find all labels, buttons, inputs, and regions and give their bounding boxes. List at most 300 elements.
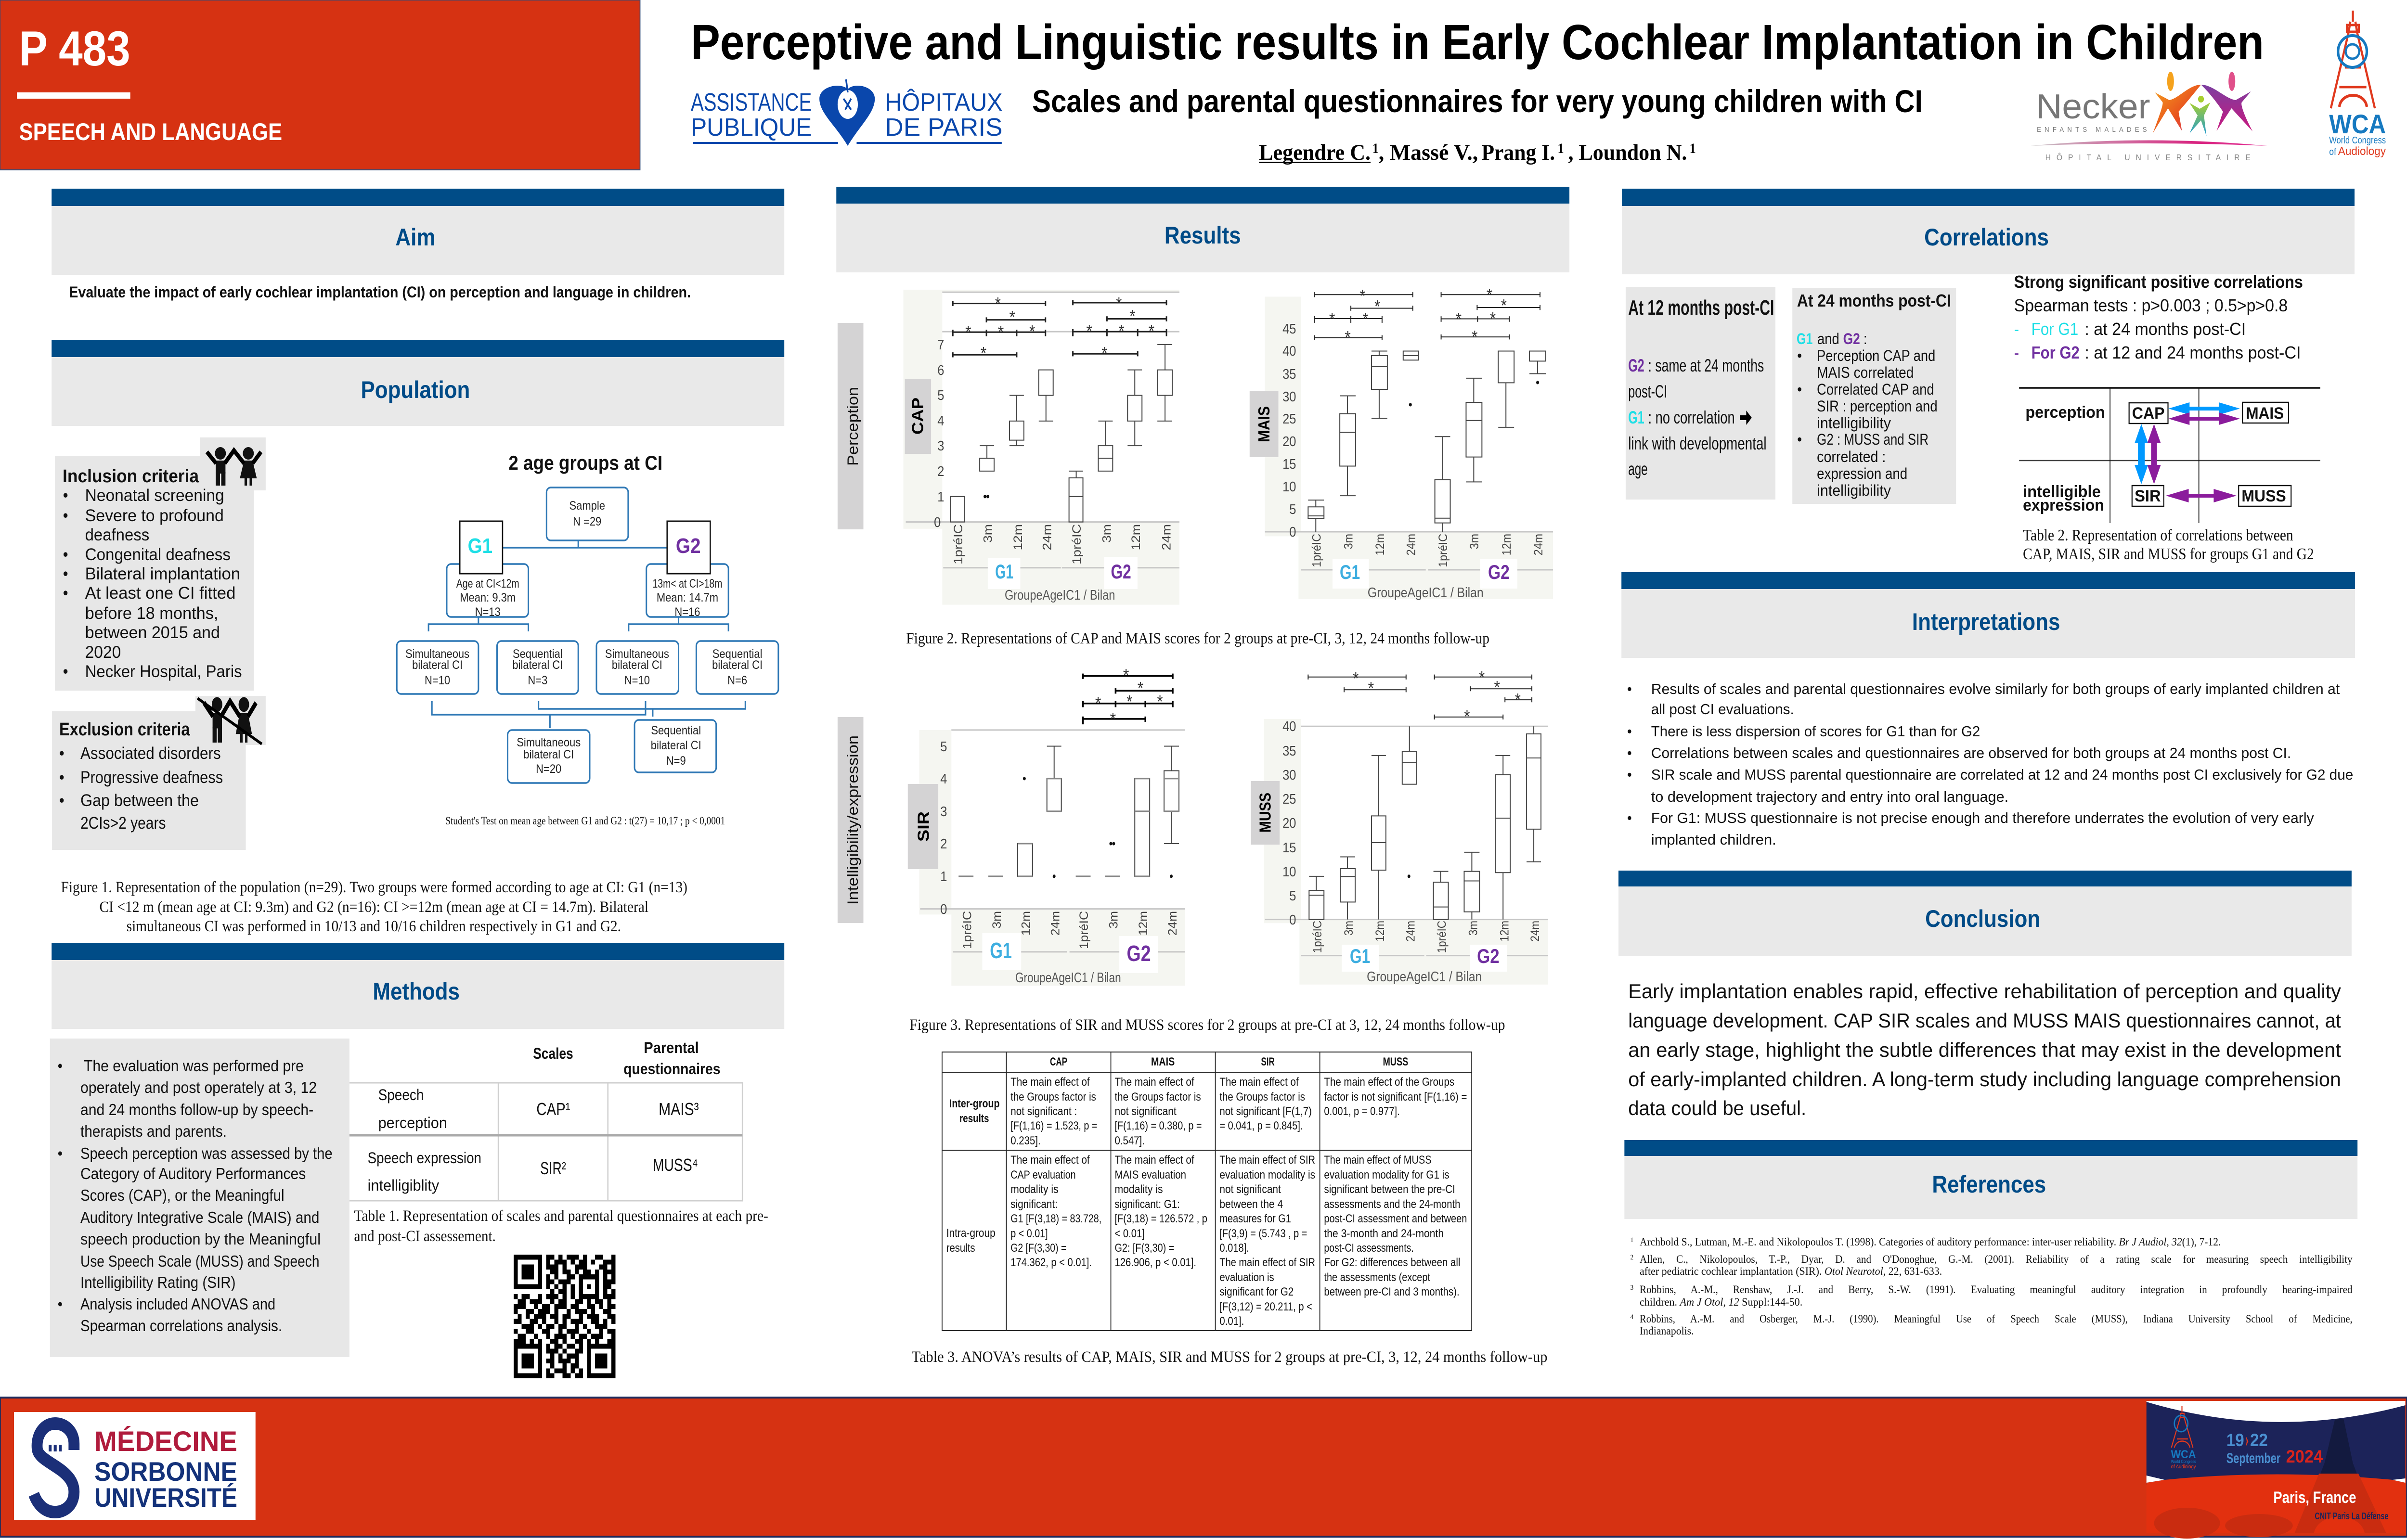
heading: correlations: Correlations (1924, 223, 2049, 251)
chart: MUSS boxplots: G2 (1477, 945, 1500, 968)
table 2: correlation diagram: intelligible (2023, 482, 2101, 500)
logo: Assistance Publique Hopitaux de Paris (691, 79, 1003, 146)
figure 1 caption (61, 878, 687, 935)
authors: 1 (1372, 141, 1379, 156)
table 3: ANOVA results: The main effect of (1010, 1076, 1090, 1088)
table 2 caption: Table 2. Representation of correlations between (2023, 526, 2293, 544)
icon: children crossed out (197, 697, 262, 744)
footer band (0, 1398, 2407, 1539)
total sequential box: Sequential (651, 724, 701, 737)
chart: MUSS boxplots: 12m (1373, 921, 1386, 942)
sample box (546, 488, 628, 540)
chart: MAIS boxplots: 3m (1468, 534, 1481, 549)
box: at 24 months: At 24 months post-CI (1797, 291, 1951, 310)
chart: MUSS boxplots: 30 (1282, 767, 1296, 783)
strong correlations text: - (2014, 320, 2019, 339)
chart: MUSS boxplots: GroupeAgeIC1 / Bilan (1367, 968, 1482, 984)
total sequential box: bilateral CI (651, 739, 701, 752)
chart: MAIS boxplots: 10 (1282, 478, 1296, 494)
G2 age box: Mean: 14.7m (657, 591, 718, 604)
chart: SIR boxplots: 3m (1107, 911, 1120, 929)
table 3: ANOVA results: The main effect of SIR (1219, 1256, 1315, 1269)
inclusion criteria box: deafness (85, 525, 149, 544)
inclusion criteria box: Inclusion criteria (63, 466, 199, 486)
figure 2 caption: Figure 2. Representations of CAP and MAIS scores for 2 groups at pre-CI, 3, 12, 24 months follow-up (906, 629, 1489, 647)
table 3: ANOVA results: CAP (1050, 1055, 1067, 1068)
box: at 24 months (1792, 288, 1956, 504)
logo: World Congress of Audiology (2329, 11, 2386, 157)
box: at 24 months: MAIS correlated (1817, 364, 1914, 381)
table 3: ANOVA results: evaluation is (1219, 1271, 1274, 1283)
chart: CAP boxplots: 24m (1160, 524, 1173, 550)
reference list: 4 (1631, 1313, 1633, 1321)
mini WCA logo (2171, 1406, 2196, 1470)
chart: MAIS boxplots: ********** (1329, 285, 1507, 347)
G1 sequential box: N=3 (528, 674, 547, 687)
student test note: Student's Test on mean age between G1 and G2 : t(27) = 10,17 ; p < 0,0001 (445, 815, 725, 827)
heading: correlations (1622, 189, 2355, 274)
table 3: ANOVA results: [F(1,16) = 0.380, p = (1114, 1119, 1202, 1132)
box: at 24 months: and (1817, 331, 1839, 347)
exclusion criteria box (52, 696, 266, 850)
table 3: ANOVA results: results (946, 1242, 975, 1254)
panel: results (836, 187, 1569, 1365)
G1 sequential box: Sequential (513, 647, 563, 660)
table 1: scales and questionnaires (349, 1040, 742, 1201)
chart: MAIS boxplots: 45 (1282, 321, 1296, 336)
methods text box: Intelligibility Rating (SIR) (80, 1273, 235, 1291)
sample box: N =29 (573, 515, 601, 528)
chart: SIR boxplots: 1préIC (961, 911, 974, 949)
reference list: Robbins, A.-M. and Osberger, M.-J. (1990). Meaningful Use of Speech Scale (MUSS), Indiana University School of Medicine, (1640, 1313, 2353, 1325)
logo: Necker hospital (2031, 72, 2267, 162)
G2 age box: N=16 (674, 605, 700, 618)
table 3: ANOVA results: post-CI assessment and between (1324, 1212, 1467, 1225)
G2 age box: 13m< at CI>18m (652, 577, 722, 590)
table 1 caption: Table 1. Representation of scales and parental questionnaires at each pre- (354, 1206, 768, 1224)
inclusion criteria box: Necker Hospital, Paris (85, 662, 242, 680)
table 2: correlation diagram: MUSS (2241, 487, 2286, 505)
G1 sequential box: bilateral CI (512, 658, 563, 671)
G1 age box (447, 564, 529, 618)
reference list: 2 (1631, 1253, 1633, 1261)
table 1: scales and questionnaires: Scales (533, 1045, 573, 1062)
chart: MAIS boxplots: 1préIC (1437, 534, 1450, 567)
total sequential box: N=9 (666, 754, 686, 767)
chart: MUSS boxplots: 40 (1282, 718, 1296, 734)
inclusion criteria box: Severe to profound (85, 506, 224, 525)
axis label: MUSS: MUSS (1256, 793, 1274, 833)
panel: conclusion (1618, 871, 2352, 1120)
table 3: ANOVA results: the Groups factor is (1219, 1091, 1305, 1103)
banner: WCA 2024 Paris: September (2226, 1450, 2280, 1466)
chart: CAP boxplots: 1préIC (952, 524, 965, 565)
panel: poster number (0, 0, 640, 170)
subtitle: Scales and parental questionnaires for very young children with CI (1032, 84, 1923, 119)
chart: SIR boxplots: 12m (1020, 911, 1033, 936)
authors: , Massé V., (1379, 140, 1478, 165)
chart: SIR boxplots: 4 (940, 770, 947, 786)
heading: conclusion: Conclusion (1925, 905, 2040, 932)
chart: MAIS boxplots: 40 (1282, 343, 1296, 359)
box: at 12 months: link with developmental (1628, 434, 1767, 453)
box: at 24 months: ••• (1797, 347, 1802, 448)
table 3: ANOVA results: not significant (1219, 1183, 1281, 1195)
heading: aim: Aim (395, 223, 435, 251)
G1 simultaneous box: bilateral CI (412, 658, 463, 671)
poster number text: P 483 (19, 22, 130, 76)
methods text box: Speech perception was assessed by the (80, 1144, 333, 1162)
logo: Necker hospital: ENFANTS MALADES (2037, 125, 2147, 133)
chart: SIR boxplots: 1préIC (1078, 911, 1091, 949)
G2 simultaneous box (596, 641, 678, 694)
methods text box: therapists and parents. (80, 1122, 227, 1140)
box: at 24 months: intelligibility (1817, 415, 1891, 432)
authors: 1 (1690, 141, 1696, 156)
G1 label box (460, 521, 503, 574)
table 3: ANOVA results: 0.01]. (1219, 1315, 1244, 1327)
chart: MUSS boxplots: 25 (1282, 791, 1296, 807)
axis label: CAP (905, 379, 931, 454)
table 3: ANOVA results: Intra-group (946, 1227, 996, 1239)
side label: perception: Perception (844, 387, 862, 466)
chart: SIR boxplots: 12m (1137, 911, 1150, 936)
figure 3 caption: Figure 3. Representations of SIR and MUSS scores for 2 groups at pre-CI at 3, 12, 24 months follow-up (909, 1015, 1505, 1033)
table 3: ANOVA results: modality is (1114, 1183, 1163, 1195)
side label: intelligibility/expression (838, 717, 863, 923)
panel: methods (50, 943, 784, 1378)
axis label: MAIS: MAIS (1255, 406, 1273, 442)
table 1: scales and questionnaires: SIR² (540, 1159, 566, 1178)
table 3: ANOVA results: The main effect of (1219, 1076, 1299, 1088)
reference list: 1 (1631, 1236, 1633, 1244)
table 3: ANOVA results: not significant (1114, 1105, 1177, 1117)
interpretations text: There is less dispersion of scores for G1 than for G2 (1651, 723, 1980, 740)
chart: MAIS boxplots: GroupeAgeIC1 / Bilan (1368, 584, 1484, 600)
exclusion criteria box: Associated disorders (80, 744, 221, 762)
box: at 12 months: G1 (1628, 408, 1644, 427)
table 2: correlation diagram: expression (2023, 496, 2104, 514)
G2 label box (667, 521, 710, 574)
logo: Medecine Sorbonne Universite: SORBONNE (94, 1457, 237, 1487)
logo: World Congress of Audiology: WCA (2329, 109, 2386, 140)
table 1: scales and questionnaires: questionnaires (623, 1061, 720, 1078)
total simultaneous box (507, 730, 590, 783)
table 3: ANOVA results: The main effect of (1114, 1076, 1194, 1088)
mini WCA logo: WCA (2171, 1448, 2196, 1461)
chart: CAP boxplots: 12m (1011, 524, 1025, 550)
G1 age box: N=13 (475, 605, 501, 618)
heading: references: References (1932, 1170, 2046, 1198)
chart: MAIS boxplots: 24m (1405, 534, 1418, 555)
axis label: CAP: CAP (909, 398, 927, 435)
arrow: CAP to SIR G2 (2147, 424, 2161, 484)
table 3: ANOVA results: CAP evaluation (1010, 1168, 1076, 1181)
table 3: ANOVA results: significant: G1: (1114, 1198, 1180, 1210)
mini WCA logo: of Audiology (2171, 1464, 2196, 1470)
methods text box: Spearman correlations analysis. (80, 1317, 282, 1335)
box: at 12 months: post-CI (1628, 382, 1667, 401)
table 3 caption: Table 3. ANOVA’s results of CAP, MAIS, SIR and MUSS for 2 groups at pre-CI, 3, 12, 24 months follow-up (912, 1348, 1547, 1365)
logo: Medecine Sorbonne Universite (14, 1412, 256, 1520)
methods text box: Use Speech Scale (MUSS) and Speech (80, 1252, 319, 1270)
logo: World Congress of Audiology: Audiology (2338, 145, 2386, 157)
table 2: correlation diagram: CAP (2132, 404, 2164, 422)
methods text box: and 24 months follow-up by speech- (80, 1101, 313, 1118)
methods text box: speech production by the Meaningful (80, 1230, 321, 1248)
chart: CAP boxplots: 3m (1100, 524, 1113, 543)
icon: children (207, 447, 261, 486)
inclusion criteria box (55, 437, 266, 691)
conclusion text: language development. CAP SIR scales and MUSS MAIS questionnaires cannot, at (1628, 1010, 2341, 1032)
chart: SIR boxplots: 24m (1166, 911, 1179, 936)
chart: MUSS boxplots: 0 (1289, 911, 1296, 927)
table 3: ANOVA results: 0.547]. (1114, 1134, 1145, 1147)
chart: MUSS boxplots: 24m (1528, 921, 1541, 942)
G1 simultaneous box: N=10 (425, 674, 450, 687)
chart: MUSS boxplots: 3m (1467, 921, 1480, 936)
table 1: scales and questionnaires: intelligiblity (368, 1177, 439, 1194)
box: at 24 months: intelligibility (1817, 482, 1891, 499)
chart: CAP boxplots (904, 290, 1179, 605)
axis label: MAIS (1250, 391, 1279, 457)
logo: Assistance Publique Hopitaux de Paris: DE PARIS (885, 114, 1003, 141)
box: at 24 months: : (1863, 331, 1867, 347)
inclusion criteria box: Congenital deafness (85, 545, 231, 564)
logo: Medecine Sorbonne Universite: MÉDECINE (94, 1425, 237, 1457)
G1 simultaneous box: Simultaneous (405, 647, 469, 660)
arrow: CAP to MAIS G1 (2168, 402, 2240, 415)
box: at 24 months: G2 (1843, 331, 1860, 347)
chart: MUSS boxplots: 20 (1282, 815, 1296, 831)
sample box: Sample (569, 499, 605, 512)
interpretations text: to development trajectory and entry into oral language. (1651, 789, 2008, 805)
table 2: correlation diagram: perception (2025, 403, 2105, 421)
G2 simultaneous box: bilateral CI (612, 658, 662, 671)
authors: , Loundon N. (1568, 140, 1687, 165)
G1 age box: Age at CI<12m (456, 577, 519, 590)
box: at 12 months: G2 (1628, 356, 1644, 375)
methods text box (50, 1039, 349, 1357)
panel: interpretations (1621, 572, 2355, 848)
box: at 24 months: G2 : MUSS and SIR (1817, 431, 1928, 448)
arrow: SIR to MUSS G2 (2166, 489, 2237, 502)
table 3: ANOVA results: evaluation modality for G1 is (1324, 1168, 1449, 1181)
table 3: ANOVA results: the 3-month and 24-month (1324, 1227, 1444, 1240)
table 3: ANOVA results: The main effect of MUSS (1324, 1154, 1432, 1166)
chart: SIR boxplots: 1 (940, 868, 947, 884)
chart: MAIS boxplots: 5 (1289, 501, 1296, 517)
strong correlations text: For G1 (2032, 320, 2078, 339)
table 3: ANOVA results: between the 4 (1219, 1198, 1283, 1210)
table 3: ANOVA results: < 0.01] (1114, 1227, 1145, 1240)
strong correlations text: Strong significant positive correlations (2014, 272, 2303, 292)
table 3: ANOVA results: [F(1,16) = 1.523, p = (1010, 1119, 1097, 1132)
table 3: ANOVA results: significant for G2 (1219, 1285, 1294, 1298)
title: Perceptive and Linguistic results in Early Cochlear Implantation in Children (691, 14, 2264, 70)
table 3: ANOVA results: assessments and the 24-month (1324, 1198, 1460, 1210)
exclusion criteria box: Exclusion criteria (59, 719, 191, 739)
figure 1 caption: CI <12 m (mean age at CI: 9.3m) and G2 (n=16): CI >=12m (mean age at CI = 14.7m). Bilateral (100, 898, 648, 915)
G1 sequential box (497, 641, 578, 694)
strong correlations text: - (2014, 343, 2019, 362)
arrow: CAP to MAIS G2 (2168, 412, 2240, 425)
banner: WCA 2024 Paris: 22 (2250, 1430, 2268, 1450)
total simultaneous box: N=20 (536, 762, 561, 775)
table 3: ANOVA results: evaluation modality is (1219, 1168, 1315, 1181)
box: at 24 months: expression and (1817, 465, 1907, 482)
table 1: scales and questionnaires: Parental (644, 1040, 699, 1056)
chart: SIR boxplots: 5 (940, 738, 947, 754)
G2 label box: G2 (676, 534, 700, 558)
chart: CAP boxplots: 12m (1129, 524, 1143, 550)
table 1: scales and questionnaires: MUSS⁴ (653, 1155, 698, 1175)
authors: Prang I. (1481, 140, 1555, 165)
exclusion criteria box: Progressive deafness (80, 768, 223, 786)
box: at 12 months: At 12 months post-CI (1628, 296, 1774, 320)
box: at 12 months (1626, 287, 1775, 500)
table 3: ANOVA results: significant: (1010, 1198, 1058, 1210)
table 3: ANOVA results: The main effect of the Groups (1324, 1076, 1454, 1088)
chart: SIR boxplots (908, 666, 1185, 986)
chart: MAIS boxplots: G1 (1340, 561, 1360, 584)
banner: WCA 2024 Paris: Paris, France (2273, 1488, 2356, 1506)
chart: MUSS boxplots: ****** (1353, 668, 1521, 726)
table 3: ANOVA results: measures for G1 (1219, 1212, 1291, 1225)
chart: MUSS boxplots: 35 (1282, 743, 1296, 758)
chart: CAP boxplots: 1préIC (1070, 524, 1084, 565)
box: at 12 months: age (1628, 459, 1648, 479)
inclusion criteria box: Neonatal screening (85, 486, 224, 504)
diagram title: 2 age groups at CI (508, 452, 662, 475)
heading: conclusion (1618, 871, 2352, 956)
chart: SIR boxplots: 3m (991, 911, 1004, 929)
flow diagram: 2 age groups at CI (397, 452, 778, 827)
table 3: ANOVA results (942, 1052, 1472, 1331)
chart: MAIS boxplots: 1préIC (1310, 534, 1324, 567)
table 3: ANOVA results: the Groups factor is (1114, 1091, 1201, 1103)
methods text box: Scores (CAP), or the Meaningful (80, 1186, 285, 1204)
G2 sequential box: Sequential (712, 647, 763, 660)
G1 label box: G1 (468, 534, 492, 558)
strong correlations text: For G2 (2032, 343, 2080, 362)
G2 simultaneous box: Simultaneous (605, 647, 669, 660)
table 3: ANOVA results: [F(3,18) = 126.572 , p (1114, 1212, 1207, 1225)
side label: perception (838, 323, 863, 529)
table 3: ANOVA results: 0.235]. (1010, 1134, 1041, 1147)
table 3: ANOVA results: [F(3,12) = 20.211, p < (1219, 1300, 1312, 1313)
axis label: SIR: SIR (915, 811, 932, 842)
G2 sequential box (696, 641, 778, 694)
chart: MUSS boxplots: 1préIC (1311, 921, 1324, 953)
panel: correlations (1622, 189, 2355, 563)
axis label: MUSS (1251, 781, 1280, 845)
interpretations text: implanted children. (1651, 832, 1776, 848)
figure 1 caption: simultaneous CI was performed in 10/13 and 10/16 children respectively in G1 and G2. (127, 917, 621, 935)
strong correlations text: : at 24 months post-CI (2084, 320, 2246, 339)
table 2 caption (2023, 526, 2314, 563)
panel: population (52, 340, 784, 935)
conclusion text: an early stage, highlight the subtle differences that may exist in the development (1628, 1039, 2341, 1062)
icon: arrow (1740, 411, 1752, 425)
chart: SIR boxplots: ****** (1095, 666, 1163, 729)
chart: SIR boxplots: 0 (940, 901, 947, 917)
methods text box: Auditory Integrative Scale (MAIS) and (80, 1208, 319, 1226)
heading: interpretations: Interpretations (1912, 608, 2060, 635)
inclusion criteria box: before 18 months, (85, 603, 218, 622)
strong correlations text: : at 12 and 24 months post-CI (2084, 343, 2301, 362)
interpretations text: SIR scale and MUSS parental questionnaire are correlated at 12 and 24 months post CI exclusively for G2 due (1651, 767, 2353, 783)
table 3: ANOVA results: Inter-group (949, 1097, 999, 1110)
table 3: ANOVA results: SIR (1261, 1055, 1275, 1068)
chart: MUSS boxplots: 15 (1282, 839, 1296, 855)
heading: references (1624, 1140, 2357, 1219)
authors: Legendre C. (1259, 140, 1371, 165)
chart: MUSS boxplots: 10 (1282, 863, 1296, 879)
chart: MAIS boxplots: 25 (1282, 411, 1296, 426)
box: at 24 months: Correlated CAP and (1817, 381, 1934, 398)
banner: WCA 2024 Paris: 19 (2226, 1430, 2244, 1450)
chart: SIR boxplots: 3 (940, 803, 947, 819)
chart: MAIS boxplots: 35 (1282, 366, 1296, 382)
table 2 caption: CAP, MAIS, SIR and MUSS for groups G1 and G2 (2023, 544, 2314, 563)
reference list (1631, 1236, 2353, 1337)
exclusion criteria box: ••• (59, 744, 65, 809)
strong correlations text: Spearman tests : p>0.003 ; 0.5>p>0.8 (2014, 296, 2288, 315)
chart: MAIS boxplots: 20 (1282, 433, 1296, 449)
G2 age box (647, 564, 728, 618)
reference list: Archbold S., Lutman, M.-E. and Nikolopoulos T. (1998). Categories of auditory performance: inter-user reliability. Br J Audiol , 32(1), 7-12. (1640, 1236, 2221, 1248)
table 3: ANOVA results: significant between the pre-CI (1324, 1183, 1455, 1195)
chart: SIR boxplots: 2 (940, 835, 947, 851)
banner: WCA 2024 Paris (2147, 1401, 2405, 1539)
table 1: scales and questionnaires: CAP¹ (536, 1100, 570, 1119)
table 2: correlation diagram (2019, 388, 2320, 523)
chart: SIR boxplots: 24m (1049, 911, 1062, 936)
table 3: ANOVA results: 126.906, p < 0.01]. (1114, 1256, 1196, 1269)
logo: Necker hospital: HÔPITAL UNIVERSITAIRE (2045, 153, 2251, 162)
heading: population (52, 340, 784, 426)
box: at 24 months: G1 (1797, 331, 1812, 347)
total simultaneous box: Simultaneous (517, 736, 581, 749)
chart: CAP boxplots: GroupeAgeIC1 / Bilan (1005, 587, 1115, 603)
inclusion criteria box: between 2015 and (85, 623, 220, 642)
panel: aim (52, 189, 784, 301)
table 3: ANOVA results: post-CI assessments. (1324, 1242, 1414, 1254)
strong correlations text (2014, 272, 2303, 362)
chart: MUSS boxplots: G1 (1350, 945, 1370, 968)
table 1: scales and questionnaires: Speech (378, 1087, 424, 1104)
interpretations text: Results of scales and parental questionnaires evolve similarly for both groups of early implanted children at (1651, 681, 2340, 697)
box: at 12 months: : same at 24 months (1648, 356, 1764, 375)
heading: aim (52, 189, 784, 275)
chart: MUSS boxplots: 3m (1342, 921, 1355, 936)
chart: MUSS boxplots: 24m (1404, 921, 1417, 942)
G2 sequential box: bilateral CI (712, 658, 763, 671)
table 3: ANOVA results: The main effect of (1010, 1154, 1090, 1166)
methods text box: The evaluation was performed pre (84, 1057, 304, 1075)
panel: references (1624, 1140, 2357, 1337)
heading: results (836, 187, 1569, 272)
banner: WCA 2024 Paris: 2024 (2286, 1447, 2323, 1466)
table 3: ANOVA results: The main effect of SIR (1219, 1154, 1315, 1166)
logo: Assistance Publique Hopitaux de Paris: ASSISTANCE (691, 89, 812, 116)
axis label: SIR (908, 784, 938, 869)
exclusion criteria box: Gap between the (80, 791, 199, 809)
chart: MAIS boxplots: 30 (1282, 388, 1296, 404)
chart: MAIS boxplots (1250, 285, 1553, 600)
interpretations text: Correlations between scales and questionnaires are observed for both groups at 24 months post CI. (1651, 745, 2291, 761)
